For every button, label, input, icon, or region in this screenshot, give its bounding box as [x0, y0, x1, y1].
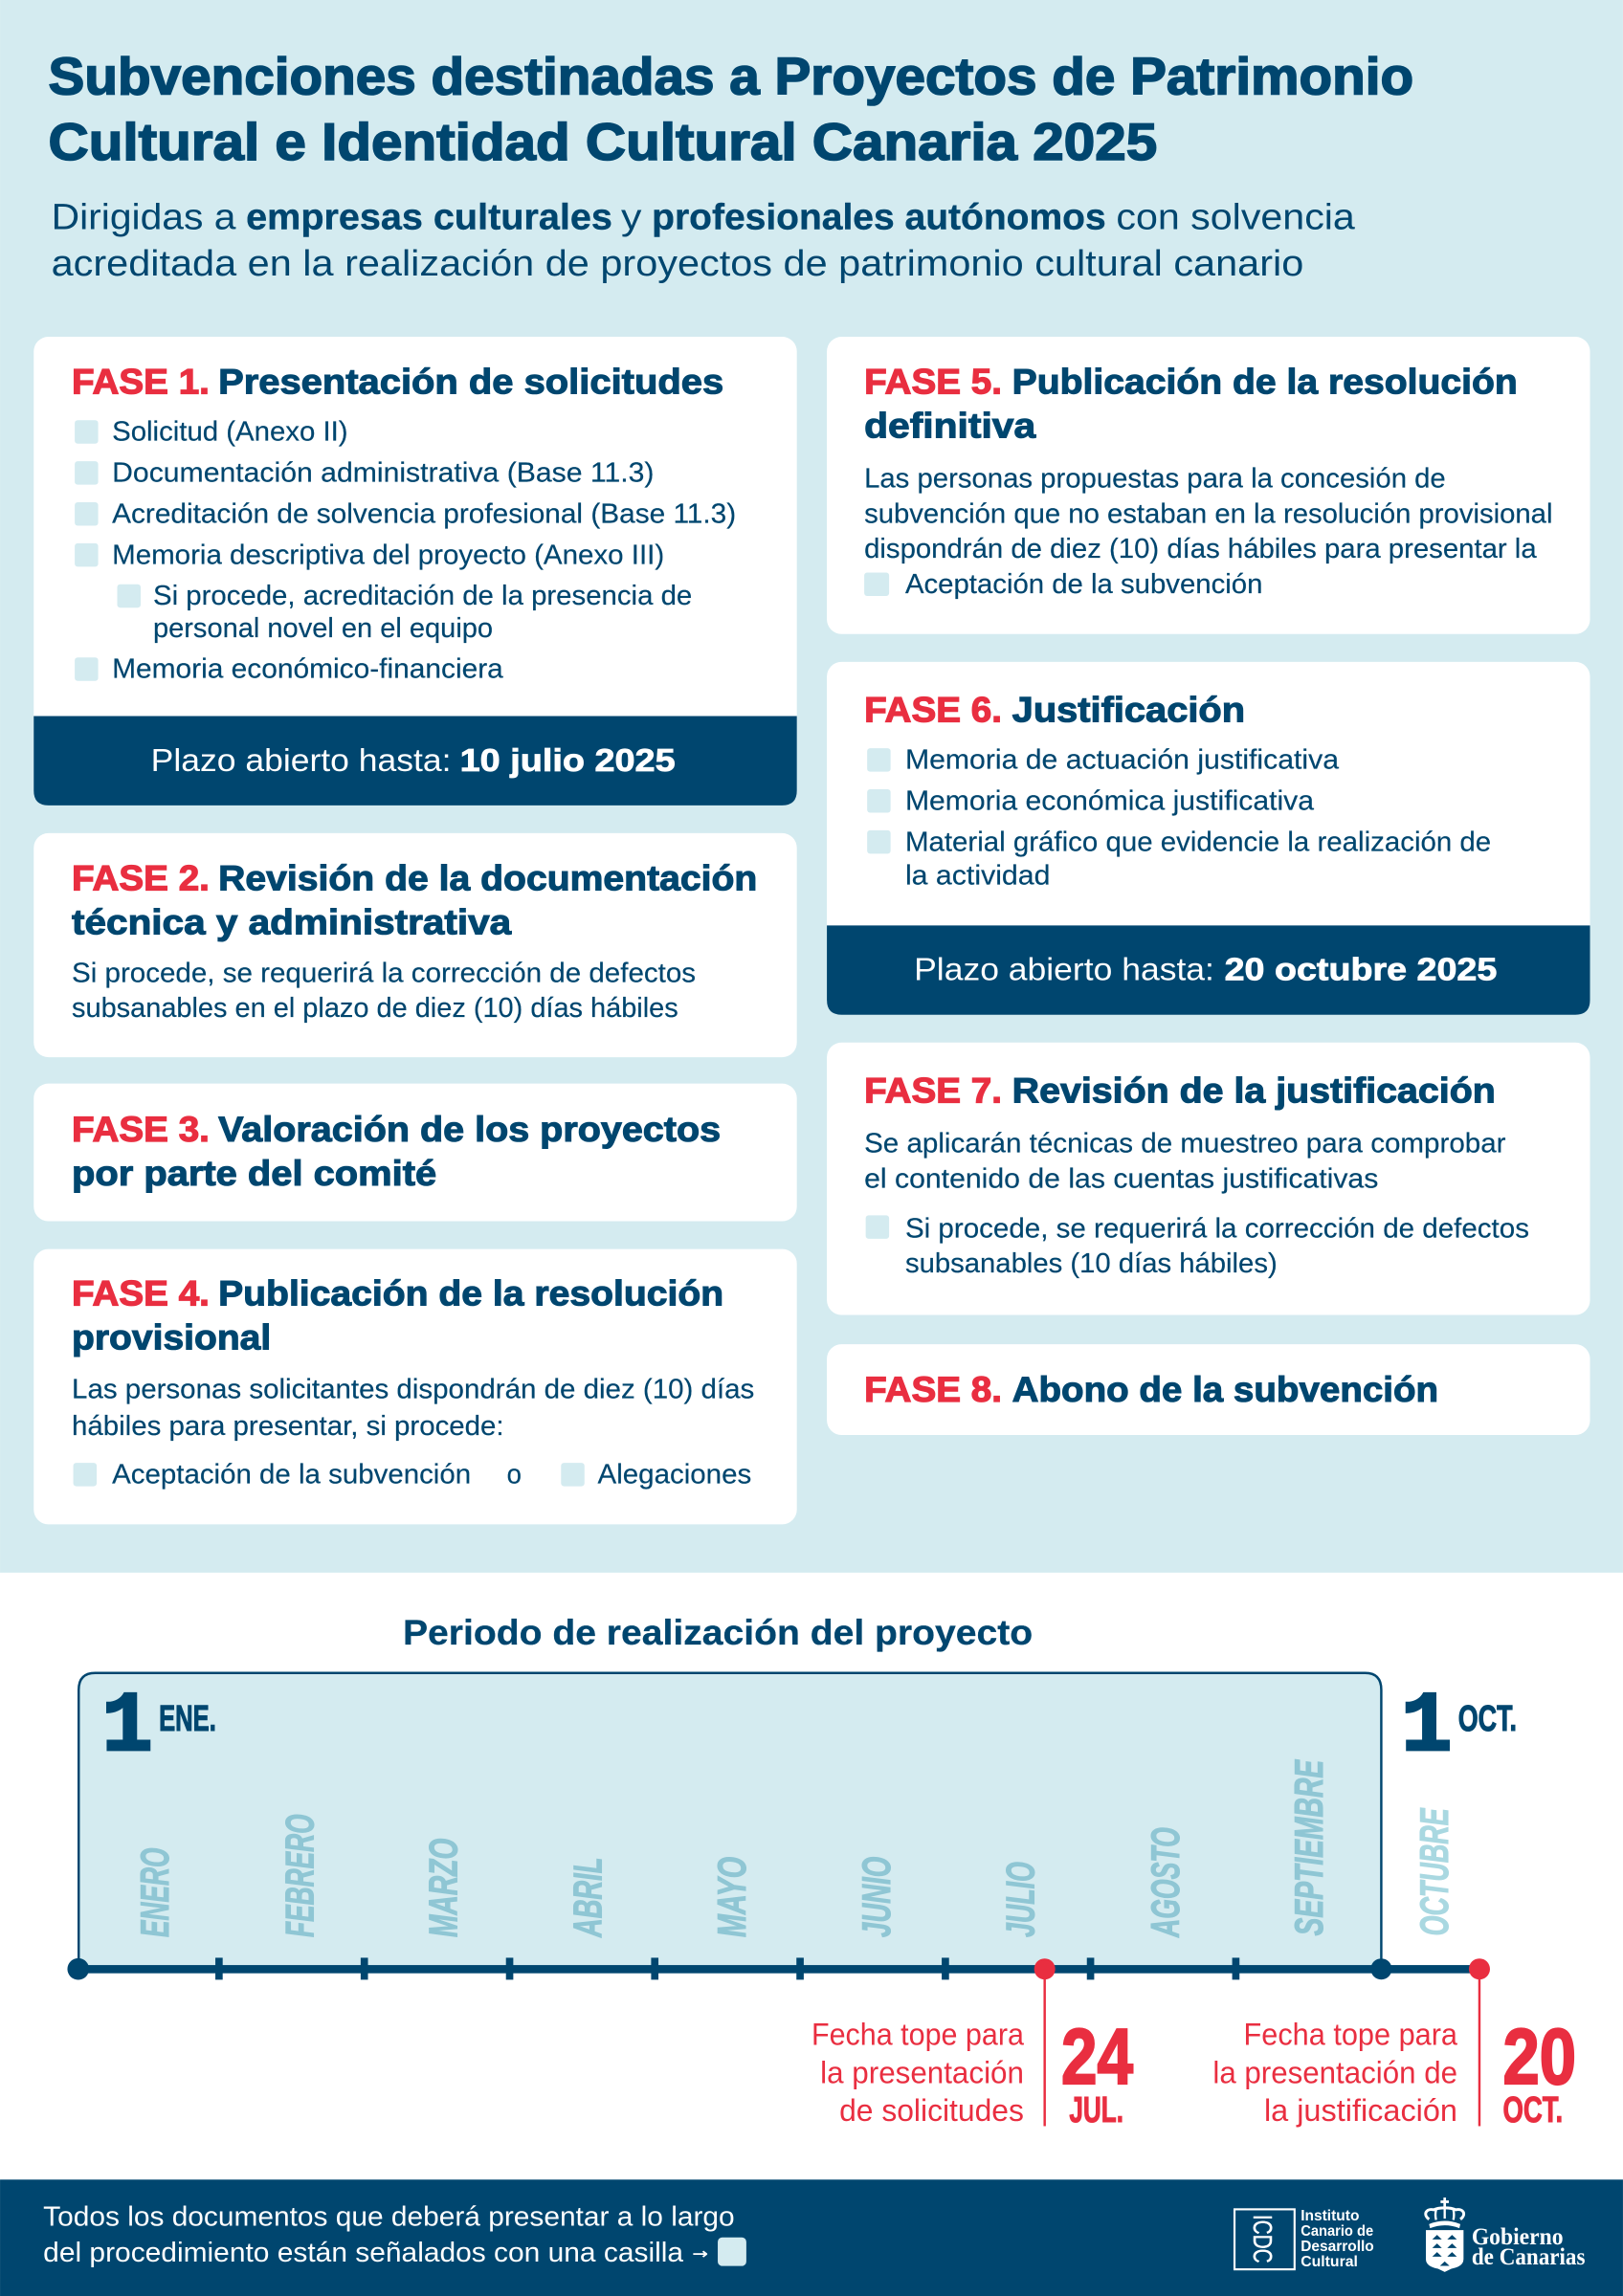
fase 5 text: subvención que no estaban en la resolución provisional: [864, 497, 1552, 528]
deadline marker: 24 JUL.: [812, 1958, 1133, 2130]
logo: ICDC: Desarrollo: [1301, 2239, 1374, 2255]
month labels: SEPTIEMBRE: [1287, 1759, 1331, 1935]
footer note: Todos los documentos que deberá presentar a lo largo: [43, 2201, 735, 2232]
deadline marker: 20 OCT.: [1212, 1958, 1576, 2130]
header background: [0, 0, 1623, 1573]
footer note: [43, 2201, 746, 2267]
fase 7 heading: FASE 7.: [864, 1071, 1002, 1111]
end date: 1 OCT.: 1: [1401, 1679, 1452, 1776]
month labels: FEBRERO: [278, 1814, 322, 1937]
fase 5 heading: Publicación de la resolución: [1012, 362, 1518, 402]
fase 6 heading: Justificación: [1012, 690, 1245, 730]
fase 7 text: [864, 1128, 1506, 1193]
fase 6 deadline strip: [827, 925, 1590, 1015]
month labels: OCTUBRE: [1412, 1807, 1456, 1935]
panel: fase 6: [827, 662, 1590, 1015]
fase 6 heading: FASE 6.: [864, 690, 1002, 730]
fase 7 checklist: subsanables (10 días hábiles): [905, 1247, 1278, 1278]
footer note: →: [692, 2245, 708, 2263]
fase 6 checklist: Memoria económica justificativa: [905, 784, 1314, 815]
fase 5 text: dispondrán de diez (10) días hábiles para presentar la: [864, 533, 1537, 563]
month labels: JULIO: [999, 1862, 1043, 1937]
fase 2 text: [72, 957, 696, 1023]
fase 6 checklist: Memoria de actuación justificativa: [905, 744, 1339, 775]
fase 1 deadline strip: 10 julio 2025: [460, 742, 676, 778]
fase 3 heading: por parte del comité: [72, 1153, 436, 1193]
fase 4 checklist: [74, 1459, 751, 1490]
subtitle: con solvencia: [1116, 197, 1356, 238]
subtitle: Dirigidas a: [52, 197, 236, 238]
panel: fase 7: [827, 1043, 1590, 1314]
fase 5 heading: FASE 5.: [864, 362, 1002, 402]
fase 4 checklist: o: [507, 1459, 522, 1490]
fase 1 document checklist: Solicitud (Anexo II): [112, 416, 348, 447]
logo: Gobierno de Canarias: Gobierno: [1472, 2223, 1564, 2250]
deadline marker: 24 JUL.: Fecha tope para: [812, 2018, 1024, 2052]
fase 7 text: el contenido de las cuentas justificativas: [864, 1162, 1378, 1193]
fase 2 heading: FASE 2.: [72, 858, 210, 898]
logo: Gobierno de Canarias: [1426, 2197, 1586, 2272]
fase 1 document checklist: Acreditación de solvencia profesional (Base 11.3): [112, 497, 736, 528]
deadline marker: 20 OCT.: la justificación: [1264, 2093, 1457, 2128]
fase 3 heading: Valoración de los proyectos: [218, 1109, 721, 1149]
project period box: [78, 1673, 1381, 1970]
end date: 1 OCT.: OCT.: [1458, 1698, 1517, 1739]
month labels: AGOSTO: [1144, 1827, 1188, 1938]
fase 1 deadline strip: [33, 716, 797, 806]
fase 4 text: Las personas solicitantes dispondrán de diez (10) días: [72, 1374, 754, 1404]
month labels: [133, 1759, 1456, 1938]
fase 1 deadline strip: Plazo abierto hasta:: [151, 742, 451, 778]
fase 3 heading: [72, 1109, 721, 1193]
fase 4 heading: Publicación de la resolución: [218, 1273, 723, 1314]
fase 6 checklist: [867, 744, 1491, 890]
timeline chart: [67, 1673, 1576, 2130]
fase 2 heading: Revisión de la documentación: [218, 858, 757, 898]
fase 7 checklist: [866, 1212, 1529, 1278]
fase 5 text: [864, 463, 1552, 563]
fase 2 text: subsanables en el plazo de diez (10) días hábiles: [72, 992, 678, 1023]
fase 1 document checklist: Documentación administrativa (Base 11.3): [112, 457, 654, 488]
deadline marker: 20 OCT.: la presentación de: [1212, 2055, 1457, 2089]
panel: fase 4: [33, 1249, 797, 1524]
fase 5 checklist: Aceptación de la subvención: [905, 568, 1262, 599]
footer note: del procedimiento están señalados con una casilla: [43, 2237, 683, 2267]
logo: ICDC: Cultural: [1301, 2254, 1358, 2270]
fase 1 document checklist: Memoria económico-financiera: [112, 653, 503, 684]
panel: fase 8: [827, 1344, 1590, 1435]
fase 7 checklist: Si procede, se requerirá la corrección de defectos: [905, 1212, 1529, 1243]
panel: fase 2: [33, 833, 797, 1057]
deadline marker: 24 JUL.: de solicitudes: [839, 2093, 1024, 2128]
fase 1 document checklist: personal novel en el equipo: [153, 612, 493, 643]
fase 4 checklist: Alegaciones: [598, 1459, 751, 1490]
fase 6 checklist: Material gráfico que evidencie la realización de: [905, 826, 1491, 856]
fase 5 heading: [864, 362, 1518, 446]
fase 8 heading: Abono de la subvención: [1012, 1369, 1438, 1409]
fase 4 heading: FASE 4.: [72, 1273, 210, 1314]
deadline marker: 20 OCT.: 20: [1502, 2012, 1576, 2101]
fase 8 heading: FASE 8.: [864, 1369, 1002, 1409]
fase 1 heading: Presentación de solicitudes: [218, 362, 723, 402]
start date: 1 ENE.: [101, 1679, 216, 1776]
month labels: MAYO: [710, 1857, 754, 1937]
subtitle: empresas culturales: [246, 197, 612, 238]
title: [49, 47, 1413, 171]
title: Cultural e Identidad Cultural Canaria 2025: [49, 112, 1157, 171]
month labels: MARZO: [422, 1839, 466, 1937]
logo: ICDC: ICDC: [1248, 2215, 1278, 2263]
fase 2 heading: técnica y administrativa: [72, 902, 512, 942]
logo: ICDC: [1234, 2208, 1374, 2270]
deadline marker: 20 OCT.: Fecha tope para: [1244, 2018, 1457, 2052]
fase 4 text: [72, 1374, 754, 1441]
panel: fase 5: [827, 337, 1590, 634]
fase 1 document checklist: Si procede, acreditación de la presencia de: [153, 580, 692, 610]
subtitle: acreditada en la realización de proyectos de patrimonio cultural canario: [52, 243, 1303, 284]
fase 6 deadline strip: 20 octubre 2025: [1225, 952, 1497, 987]
deadline marker: 20 OCT.: OCT.: [1502, 2089, 1563, 2130]
fase 4 heading: [72, 1273, 723, 1357]
fase 5 heading: definitiva: [864, 406, 1036, 446]
fase 4 heading: provisional: [72, 1316, 271, 1357]
timeline heading: Periodo de realización del proyecto: [403, 1612, 1033, 1652]
axis line with month ticks: [67, 1957, 1479, 1980]
deadline marker: 24 JUL.: la presentación: [820, 2055, 1024, 2089]
fase 1 document checklist: Memoria descriptiva del proyecto (Anexo III): [112, 539, 664, 569]
start date: 1 ENE.: ENE.: [159, 1698, 216, 1739]
fase 1 document checklist: [75, 416, 736, 684]
deadline marker: 24 JUL.: JUL.: [1069, 2089, 1123, 2130]
fase 4 checklist: Aceptación de la subvención: [112, 1459, 471, 1490]
fase 2 text: Si procede, se requerirá la corrección de defectos: [72, 957, 696, 987]
fase 7 text: Se aplicarán técnicas de muestreo para comprobar: [864, 1128, 1506, 1159]
subtitle: [52, 197, 1356, 284]
start date: 1 ENE.: 1: [101, 1679, 153, 1776]
fase 6 heading: [864, 690, 1245, 730]
logo: Gobierno de Canarias: de Canarias: [1472, 2243, 1586, 2270]
end date: 1 OCT.: [1401, 1679, 1517, 1776]
fase 3 heading: FASE 3.: [72, 1109, 210, 1149]
month labels: ENERO: [133, 1848, 177, 1937]
footer bar: [0, 2179, 1623, 2296]
fase 2 heading: [72, 858, 757, 942]
title: Subvenciones destinadas a Proyectos de Patrimonio: [49, 47, 1413, 106]
logo: ICDC: Instituto: [1301, 2208, 1359, 2224]
month labels: ABRIL: [566, 1858, 610, 1938]
fase 7 heading: Revisión de la justificación: [1012, 1071, 1496, 1111]
fase 6 deadline strip: Plazo abierto hasta:: [914, 952, 1214, 987]
subtitle: profesionales autónomos: [652, 197, 1106, 238]
fase 6 checklist: la actividad: [905, 859, 1050, 890]
panel: fase 1: [33, 337, 797, 806]
panel: fase 3: [33, 1084, 797, 1222]
subtitle: y: [621, 197, 642, 238]
logo: ICDC: Canario de: [1301, 2223, 1373, 2240]
fase 4 text: hábiles para presentar, si procede:: [72, 1410, 504, 1441]
deadline marker: 24 JUL.: 24: [1061, 2012, 1133, 2101]
month labels: JUNIO: [855, 1857, 899, 1937]
fase 5 text: Las personas propuestas para la concesión de: [864, 463, 1446, 494]
fase 1 heading: FASE 1.: [72, 362, 210, 402]
